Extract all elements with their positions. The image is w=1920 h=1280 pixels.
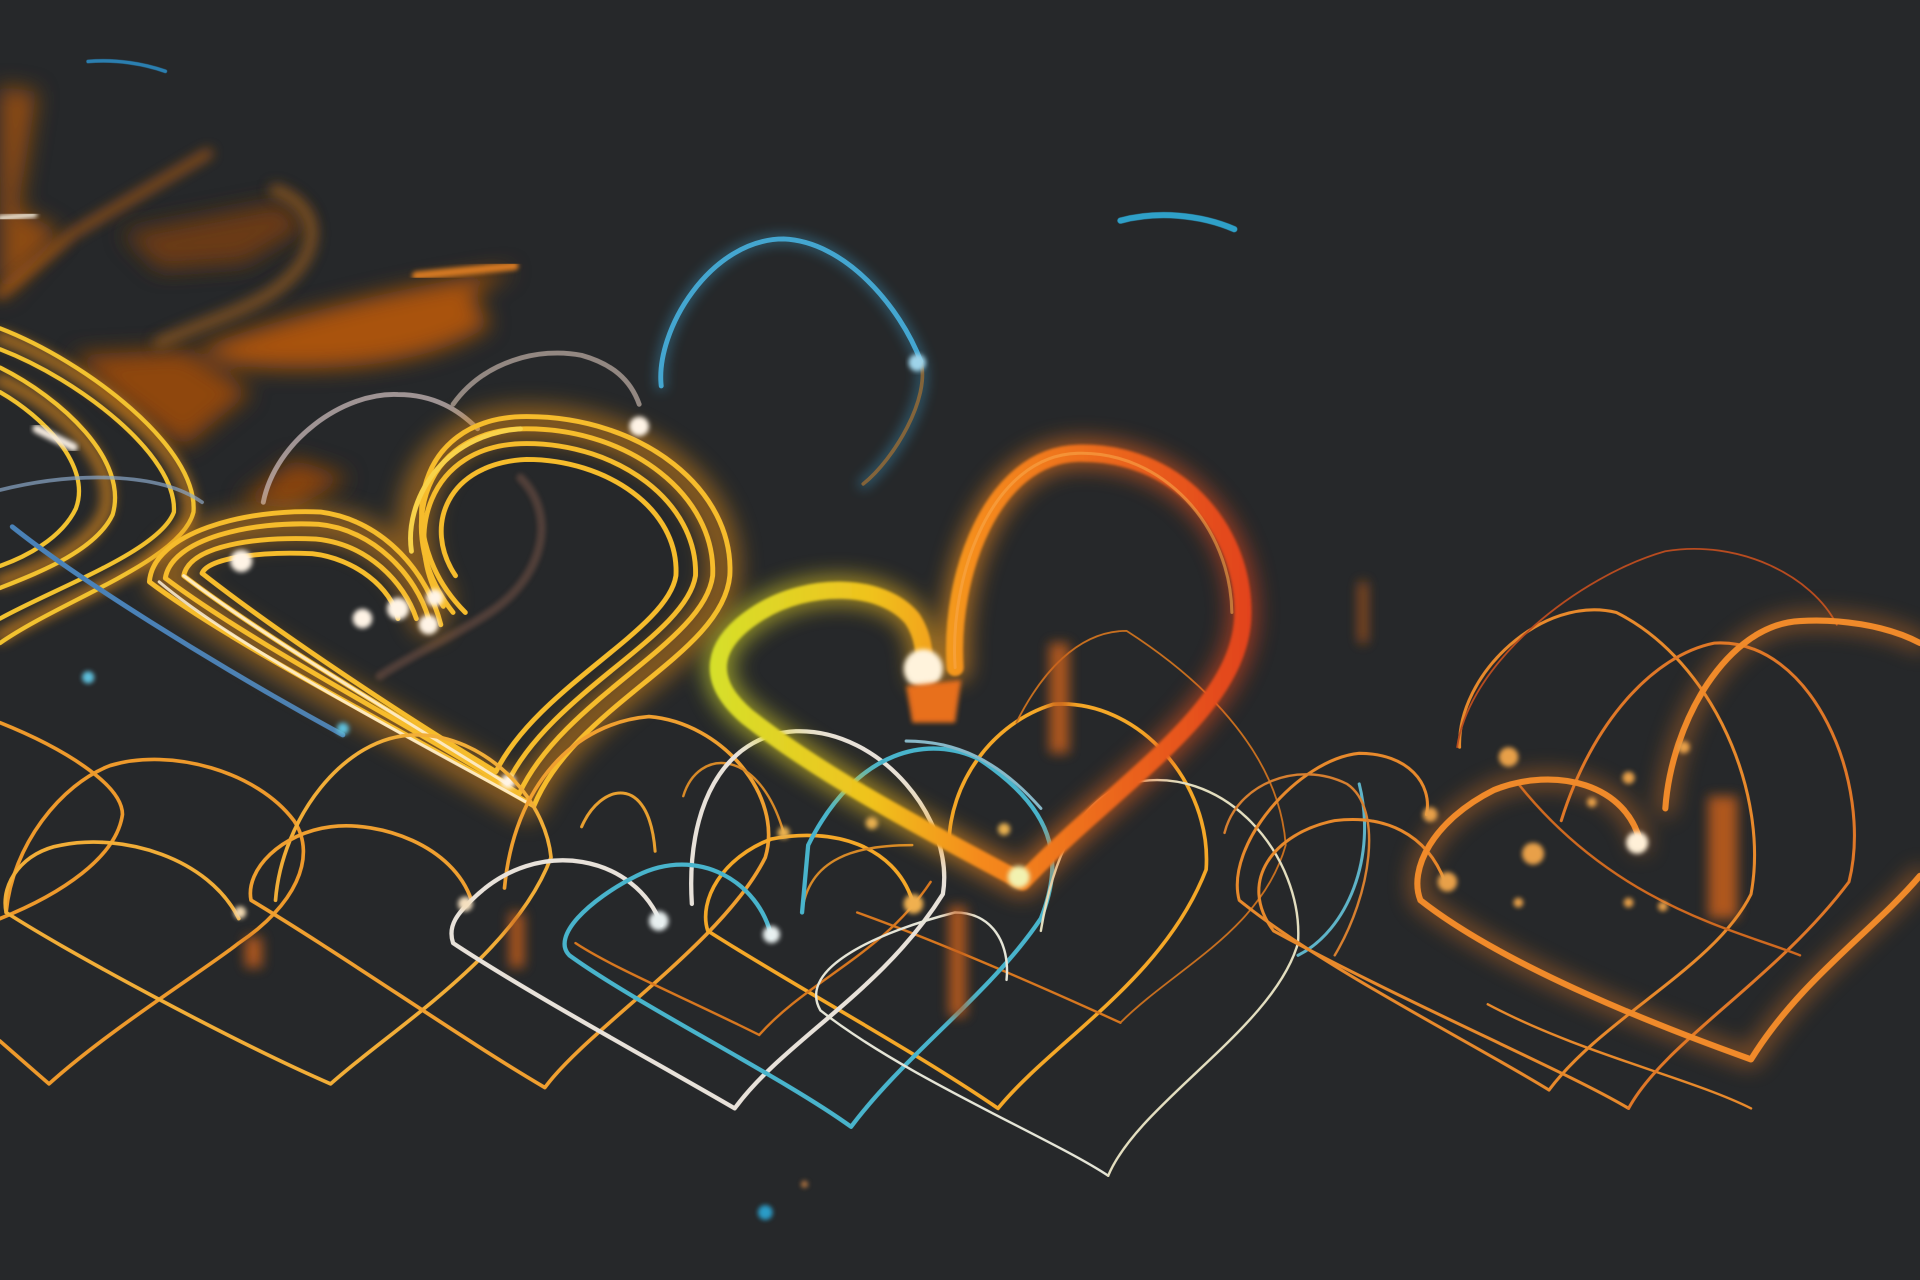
- blue arc top centre: [661, 239, 926, 484]
- big yellow heart: [149, 417, 730, 806]
- main orange and yellow heart: [718, 453, 1243, 888]
- vertical orange reflections: [245, 582, 1738, 1017]
- blue and white thin hearts: [451, 731, 1365, 1176]
- bright dots on yellow heart: [82, 417, 649, 789]
- blue streak top left: [88, 61, 165, 71]
- blue streak top right: [1120, 215, 1234, 229]
- lower row of thin orange hearts: [0, 631, 1286, 1108]
- cluster of thin orange hearts right: [1224, 549, 1854, 1108]
- orange smear top left: [0, 86, 514, 508]
- partial yellow heart at left edge: [0, 328, 343, 735]
- pale arcs behind yellow heart: [263, 353, 639, 676]
- glowing dots right cluster: [1423, 741, 1690, 911]
- bright orange heart right: [1417, 621, 1920, 1059]
- glowing dots centre: [234, 817, 1010, 1220]
